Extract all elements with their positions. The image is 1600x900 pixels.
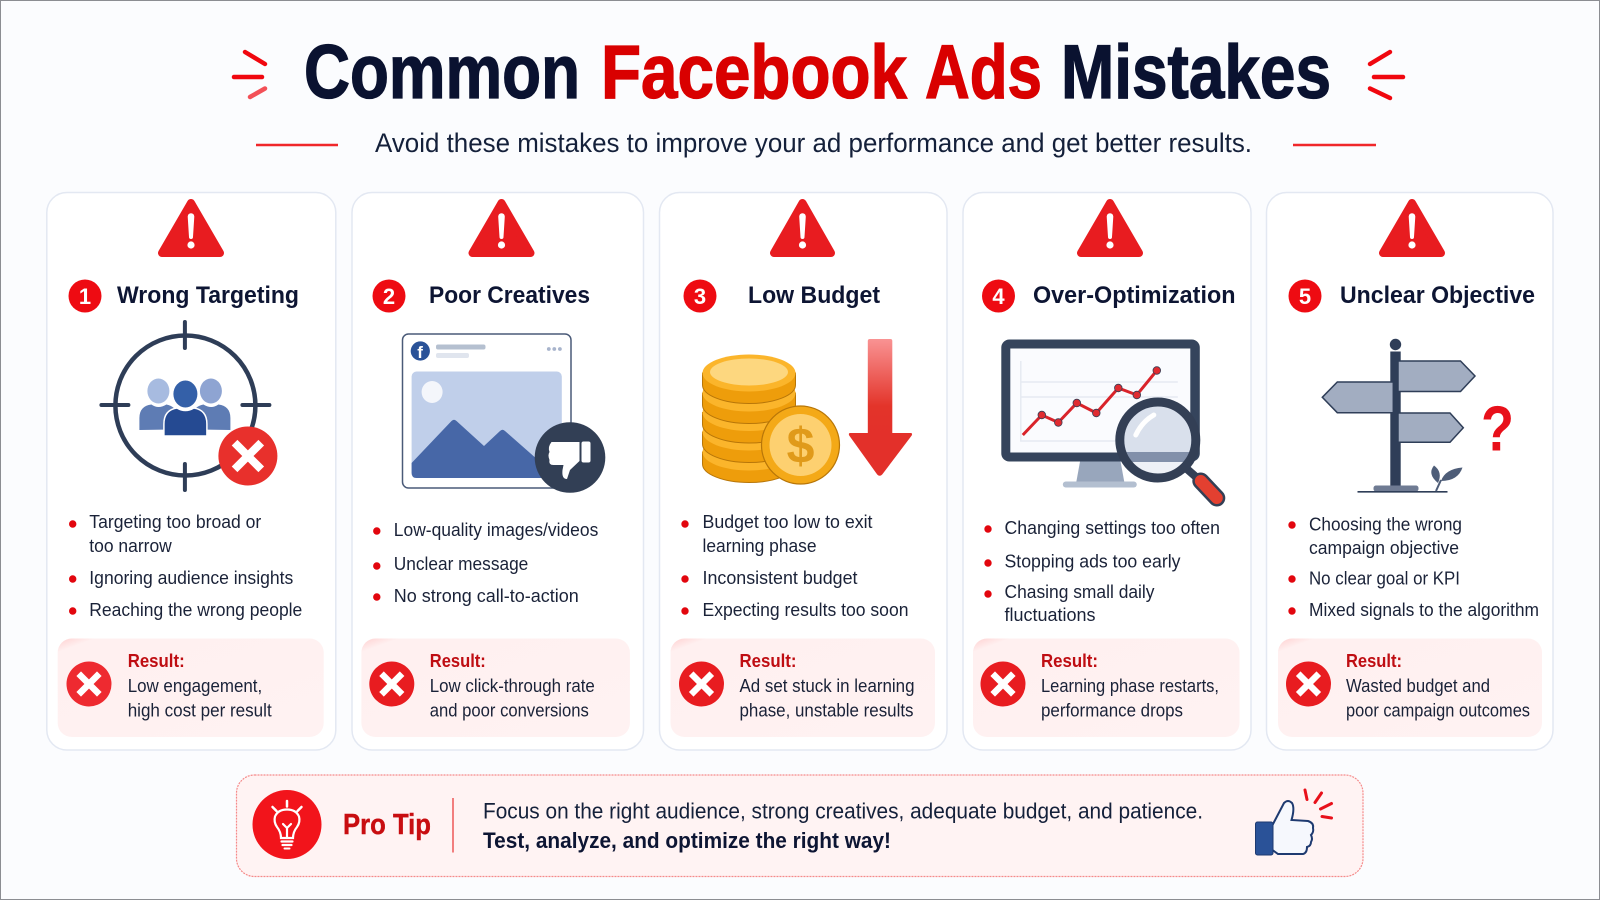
bullet list: learning phase — [702, 535, 816, 556]
result box: Low engagement, — [128, 675, 262, 696]
pro tip text: Test, analyze, and optimize the right way! — [483, 828, 891, 853]
bullet list: Changing settings too often — [1004, 517, 1220, 538]
bullet list: Choosing the wrong — [1309, 514, 1462, 534]
subtitle with side rules: Avoid these mistakes to improve your ad performance and get better results. — [375, 128, 1252, 158]
icon: warning triangle — [472, 203, 530, 253]
icon: light bulb — [252, 790, 322, 859]
heading: Wrong Targeting — [117, 282, 299, 309]
bullet list: Unclear message — [394, 553, 528, 574]
bullet list: Ignoring audience insights — [89, 567, 293, 588]
result box — [1278, 638, 1542, 737]
number badge 1: 1 — [79, 284, 91, 309]
icon: signpost with question mark: ? — [1481, 392, 1514, 464]
bullet list — [681, 511, 908, 620]
panel: wrong targeting — [47, 192, 336, 750]
icon: warning triangle — [1383, 203, 1441, 253]
number badge 5 — [1288, 280, 1322, 312]
result box: high cost per result — [128, 700, 272, 720]
result box: phase, unstable results — [740, 700, 914, 720]
bullet list: No clear goal or KPI — [1309, 568, 1460, 588]
icon: thumbs up — [1256, 790, 1332, 855]
pro tip banner — [236, 775, 1363, 876]
number badge 4: 4 — [992, 284, 1005, 309]
number badge 3: 3 — [694, 284, 706, 309]
result box — [361, 638, 630, 737]
result box: Result: — [1346, 651, 1402, 671]
icon: facebook post with thumbs down — [402, 334, 605, 493]
panel: unclear objective — [1266, 192, 1553, 750]
icon: audience target with x — [101, 322, 277, 490]
bullet list: Expecting results too soon — [702, 599, 908, 620]
result box: Wasted budget and — [1346, 675, 1490, 696]
bullet list — [69, 511, 302, 620]
icon: signpost with question mark — [1322, 339, 1514, 492]
decorative sparks left of title — [234, 52, 265, 97]
result box: Learning phase restarts, — [1041, 675, 1219, 696]
result box: Result: — [128, 651, 185, 671]
title: Mistakes — [1061, 30, 1331, 115]
title — [304, 30, 1331, 115]
result box: poor campaign outcomes — [1346, 700, 1530, 720]
bullet list: Stopping ads too early — [1004, 550, 1181, 572]
icon: coin stack with down arrow: $ — [787, 418, 815, 474]
number badge 5: 5 — [1299, 284, 1311, 309]
bullet list: campaign objective — [1309, 537, 1459, 558]
icon: facebook post with thumbs down: f — [417, 343, 423, 362]
heading: Over-Optimization — [1033, 282, 1236, 309]
panel: low budget — [660, 192, 947, 750]
result box: Result: — [430, 651, 486, 671]
heading: Unclear Objective — [1340, 282, 1535, 309]
title: Common — [304, 30, 580, 115]
bullet list: Low-quality images/videos — [394, 519, 598, 540]
result box: and poor conversions — [430, 700, 589, 720]
panel: poor creatives — [352, 192, 644, 750]
result box — [973, 638, 1240, 737]
bullet list: Mixed signals to the algorithm — [1309, 599, 1539, 620]
icon: coin stack with down arrow — [702, 339, 912, 484]
number badge 2: 2 — [383, 284, 395, 309]
heading: Poor Creatives — [429, 282, 590, 309]
bullet list: Budget too low to exit — [702, 511, 872, 532]
icon: warning triangle — [162, 203, 220, 253]
title: Ads — [925, 30, 1042, 115]
number badge 1 — [68, 280, 102, 312]
result box: Result: — [1041, 651, 1098, 671]
result box — [670, 638, 935, 737]
pro tip text — [483, 798, 1203, 853]
bullet list — [1288, 514, 1539, 620]
title: Facebook — [601, 30, 908, 115]
decorative sparks right of title — [1370, 52, 1403, 98]
number badge 3 — [684, 280, 716, 312]
bullet list: Reaching the wrong people — [89, 599, 302, 620]
bullet list: fluctuations — [1004, 604, 1096, 625]
icon: monitor chart with magnifier — [1001, 340, 1217, 498]
number badge 2 — [372, 280, 406, 312]
bullet list: No strong call-to-action — [394, 585, 579, 606]
bullet list: Inconsistent budget — [702, 567, 858, 588]
bullet list — [373, 519, 598, 606]
pro tip text: Focus on the right audience, strong creatives, adequate budget, and patience. — [483, 798, 1203, 824]
number badge 4 — [982, 280, 1015, 312]
result box: Ad set stuck in learning — [740, 675, 914, 696]
pro tip label: Pro Tip — [343, 809, 431, 841]
heading: Low Budget — [748, 282, 880, 309]
icon: warning triangle — [774, 203, 831, 253]
icon: warning triangle — [1081, 203, 1139, 253]
panel: over-optimization — [963, 192, 1251, 750]
bullet list — [984, 517, 1220, 625]
bullet list: too narrow — [89, 535, 172, 556]
bullet list: Chasing small daily — [1004, 581, 1155, 602]
result box: performance drops — [1041, 700, 1183, 720]
result box: Result: — [740, 651, 796, 671]
result box — [58, 638, 324, 737]
bullet list: Targeting too broad or — [89, 511, 261, 532]
result box: Low click-through rate — [430, 675, 595, 696]
